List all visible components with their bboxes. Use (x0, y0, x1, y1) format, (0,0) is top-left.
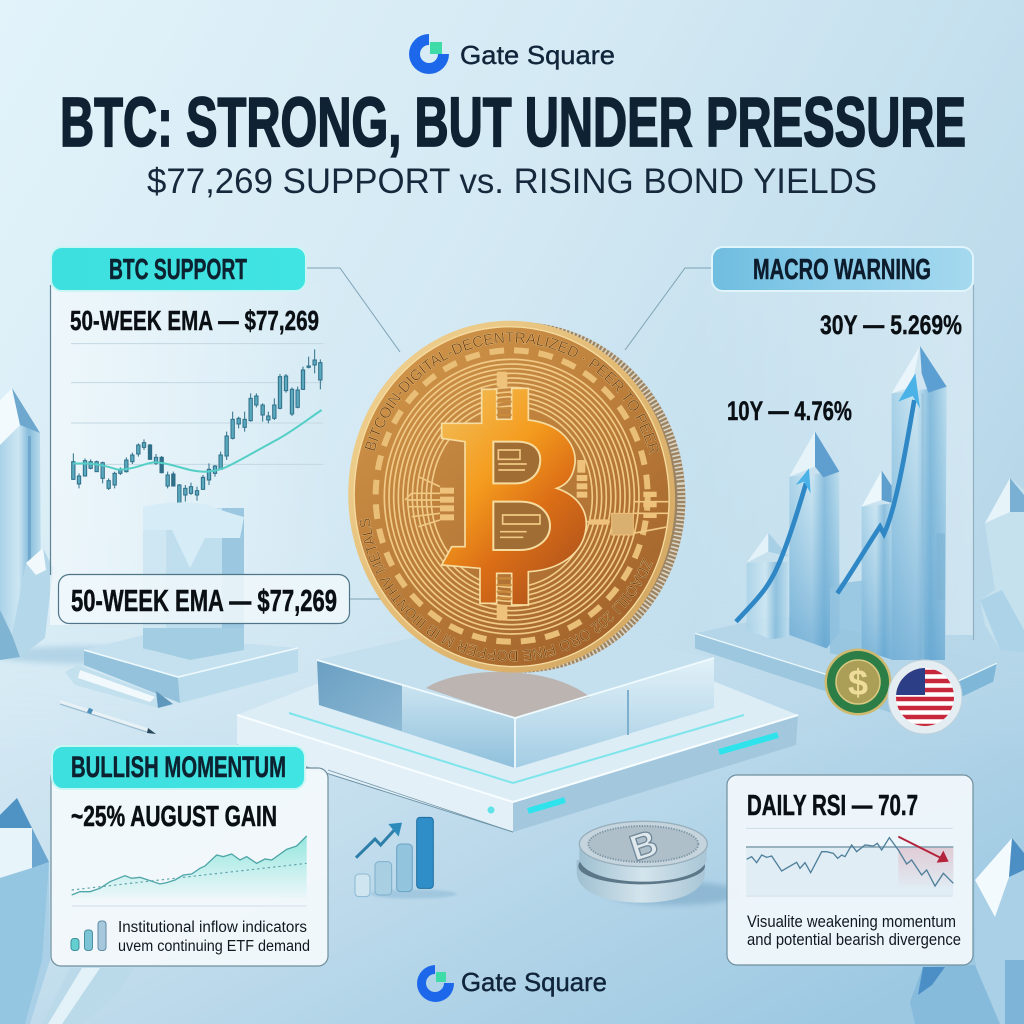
dashed contact ring (376, 350, 648, 642)
pen (60, 702, 156, 734)
bottom-left crystal (0, 798, 134, 1024)
growth area chart (72, 836, 307, 906)
bullish momentum tab (52, 746, 305, 789)
left crystal cluster (0, 388, 53, 660)
silver coin stack: B (625, 822, 663, 869)
mid bar (862, 471, 893, 660)
top logo: Gate Square (409, 34, 615, 74)
panel body (51, 768, 328, 966)
circuit traces and chips (405, 372, 668, 620)
inflow note (118, 919, 310, 955)
concentric circuit rings (384, 359, 639, 634)
US flag coin (888, 660, 962, 734)
ring lettering: BITCOIN-DIGITAL-DECENTRALIZED · PEER TO PEER (364, 332, 659, 454)
panel body (690, 285, 973, 635)
inflow note: Institutional inflow indicators (118, 919, 307, 936)
arrow 10Y (736, 468, 811, 622)
BTC support tab (51, 247, 306, 291)
BTC support tab: BTC SUPPORT (109, 254, 247, 286)
glass base (695, 615, 997, 720)
right crystal cluster (980, 478, 1024, 652)
bottom-right crystal (910, 838, 1024, 1024)
RSI note: and potential bearish divergence (747, 931, 961, 949)
coin face (340, 314, 683, 680)
white platform (237, 620, 798, 832)
panel body (727, 775, 973, 965)
small bar (747, 533, 788, 639)
10Y bar (789, 432, 839, 648)
stub bar (830, 580, 867, 660)
panel: macro warning (625, 247, 974, 640)
cyan light bars (528, 735, 778, 811)
inflow note: uvem continuing ETF demand (118, 938, 310, 955)
rising yield crystal bars (695, 346, 997, 720)
RSI note (747, 913, 961, 949)
coin reflection (426, 672, 590, 718)
silver coin stack (577, 821, 740, 905)
candlestick chart (71, 344, 323, 512)
10Y label: 10Y — 4.76% (727, 396, 852, 426)
connector line (328, 770, 513, 832)
30Y label: 30Y — 5.269% (820, 310, 962, 340)
mini bar icon with rising arrow (355, 817, 457, 899)
30Y bar (892, 346, 947, 660)
callout: 50-week EMA (58, 574, 382, 624)
bitcoin B symbol (442, 388, 586, 605)
bottom logo: Gate Square (417, 965, 607, 1002)
connector line to coin (625, 268, 712, 350)
ring lettering: ZDAOIILI 202 ORO FINE DOPPER M IB IIIONTHV METALS (359, 518, 653, 662)
crystal rod (65, 665, 173, 708)
bullish momentum tab: BULLISH MOMENTUM (71, 751, 286, 784)
EMA heading: 50-WEEK EMA — $77,269 (70, 305, 319, 336)
ring lettering (359, 332, 659, 662)
coin edge (340, 308, 700, 686)
RSI line chart (746, 828, 953, 896)
gain heading: ~25% AUGUST GAIN (71, 801, 277, 833)
callout: 50-week EMA: 50-WEEK EMA — $77,269 (71, 583, 337, 618)
bottom logo: Gate Square: Gate Square (461, 967, 607, 997)
subtitle: $77,269 SUPPORT vs. RISING BOND YIELDS (147, 162, 877, 201)
dollar coin (824, 648, 892, 716)
ice block pedestal (143, 503, 244, 660)
panel: daily RSI (727, 775, 973, 965)
panel body (50, 285, 335, 625)
macro warning tab: MACRO WARNING (753, 254, 931, 286)
RSI heading: DAILY RSI — 70.7 (747, 790, 918, 822)
panel: bullish momentum (51, 746, 513, 966)
top logo: Gate Square: Gate Square (460, 40, 615, 70)
macro warning tab (712, 247, 973, 291)
arrow 30Y (837, 373, 920, 593)
panel: BTC support (50, 247, 400, 625)
connector line to coin (307, 268, 400, 352)
bitcoin coin (348, 320, 686, 673)
inflow mini bars (71, 921, 106, 950)
RSI note: Visualite weakening momentum (747, 913, 956, 931)
coin rim (334, 307, 690, 686)
dollar coin: $ (848, 662, 868, 703)
glass base plate under ice (84, 635, 298, 703)
glass block (317, 615, 714, 768)
